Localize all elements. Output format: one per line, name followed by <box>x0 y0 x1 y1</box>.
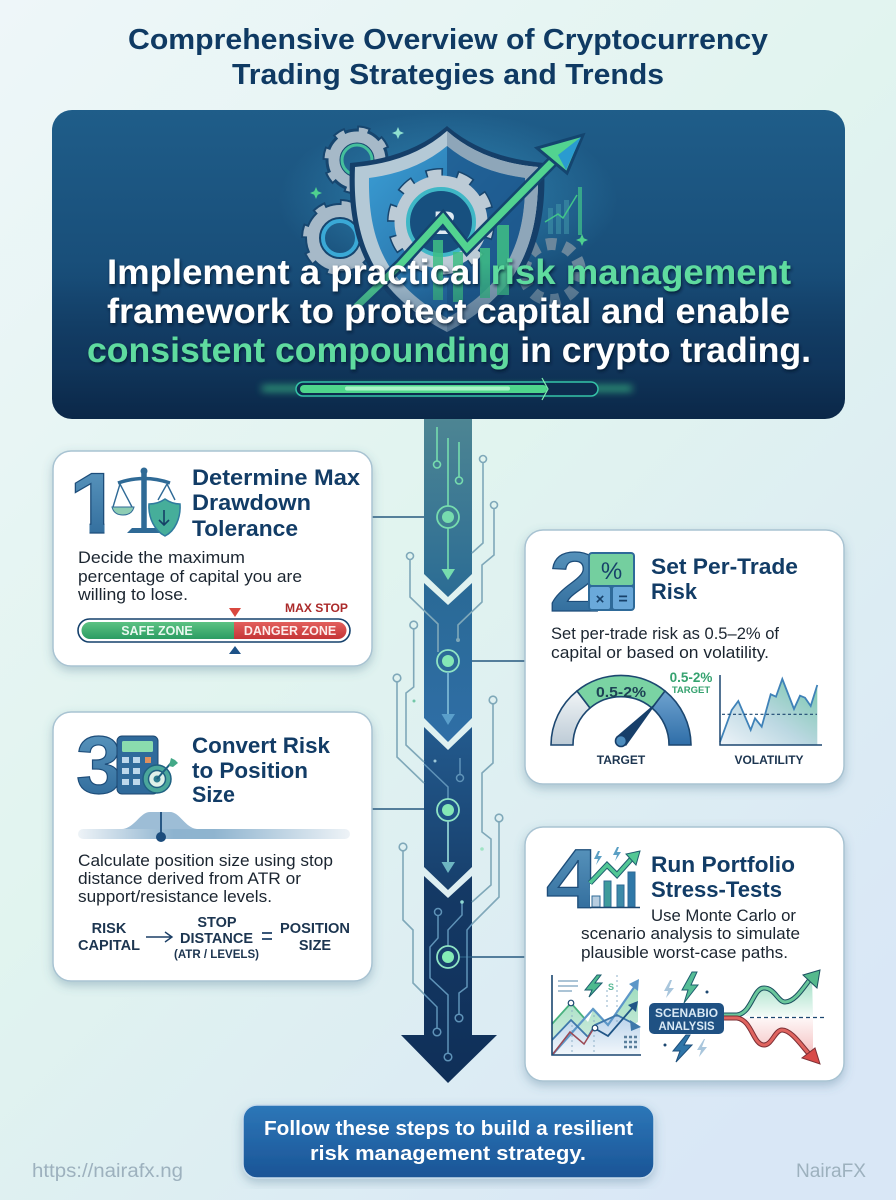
gauge chart <box>551 670 712 767</box>
title: Trading Strategies and Trends <box>232 59 664 91</box>
central downward arrow spine <box>401 419 497 1083</box>
icon: percent calculator: % <box>601 558 622 585</box>
scenario analysis diagram: SCENABIO <box>655 1006 718 1020</box>
gauge chart: 0.5-2% <box>596 684 646 701</box>
panel: step 4 stress tests <box>525 827 844 1081</box>
zone bar: DANGER ZONE <box>244 624 336 638</box>
step description: Calculate position size using stop <box>78 851 333 870</box>
gauge chart: TARGET <box>672 685 710 696</box>
gauge chart: TARGET <box>597 753 646 767</box>
brand name: NairaFX <box>796 1161 866 1182</box>
zone bar: SAFE ZONE <box>121 624 193 638</box>
gauge chart: 0.5-2% <box>670 670 712 685</box>
step heading: Determine Max <box>192 465 361 490</box>
step heading <box>651 852 795 902</box>
step description: scenario analysis to simulate <box>581 924 800 943</box>
step description: distance derived from ATR or <box>78 869 301 888</box>
icon: shield, gears and rising arrow: B <box>433 205 457 241</box>
panel: step 1 drawdown tolerance <box>53 451 372 666</box>
connector lines to cards <box>372 517 525 957</box>
step heading <box>651 554 798 604</box>
icon: percent calculator: × <box>596 591 605 608</box>
hero statement: Implement a practical risk management <box>107 253 791 292</box>
scenario analysis diagram: ANALYSIS <box>658 1019 714 1033</box>
step description <box>581 906 800 962</box>
step heading: Tolerance <box>192 516 298 541</box>
step description <box>77 548 302 604</box>
step heading: Convert Risk <box>192 733 330 758</box>
stop distance slider <box>78 812 350 842</box>
call to action button: risk management strategy. <box>310 1143 586 1165</box>
position size formula: SIZE <box>299 938 331 954</box>
position size formula: POSITION <box>280 921 350 937</box>
progress bar <box>262 378 632 400</box>
step heading <box>192 733 330 807</box>
position size formula: RISK <box>92 921 127 937</box>
step heading <box>192 465 361 541</box>
hero statement: consistent compounding in crypto trading. <box>87 331 811 370</box>
icon: shield, gears and rising arrow <box>309 126 588 338</box>
volatility chart: VOLATILITY <box>734 753 804 767</box>
monte carlo paths chart: S <box>608 982 614 992</box>
panel: step 3 position size <box>53 712 372 981</box>
position size formula: DISTANCE <box>180 931 253 947</box>
position size formula: CAPITAL <box>78 938 140 954</box>
step nodes and arrows on spine <box>437 438 459 968</box>
step heading: to Position <box>192 758 308 783</box>
circuit traces <box>393 427 503 1061</box>
step number 3: 3 <box>76 720 122 811</box>
call to action button <box>243 1105 654 1178</box>
title <box>128 24 768 91</box>
volatility chart <box>720 675 822 767</box>
step number 4: 4 <box>546 832 600 926</box>
step description <box>551 624 779 662</box>
step description: capital or based on volatility. <box>551 643 769 662</box>
step heading: Size <box>192 782 235 807</box>
title: Comprehensive Overview of Cryptocurrency <box>128 24 768 56</box>
step heading: Stress-Tests <box>651 877 782 902</box>
monte carlo paths chart <box>552 975 641 1055</box>
position size formula: STOP <box>197 915 237 931</box>
hero statement <box>87 253 811 370</box>
position size formula <box>78 915 350 961</box>
panel: step 2 per-trade risk <box>525 530 844 784</box>
step description: support/resistance levels. <box>78 887 272 906</box>
step description: percentage of capital you are <box>78 567 302 586</box>
position size formula: (ATR / LEVELS) <box>174 949 259 961</box>
step description: plausible worst-case paths. <box>581 943 788 962</box>
website url: https://nairafx.ng <box>32 1161 183 1182</box>
icon: balance scale with shield <box>112 468 180 536</box>
step heading: Set Per-Trade <box>651 554 798 579</box>
call to action button: Follow these steps to build a resilient <box>264 1118 633 1140</box>
panel: hero banner <box>52 110 845 419</box>
icon: bar chart with rising arrow <box>590 847 640 908</box>
step description: Use Monte Carlo or <box>651 906 796 925</box>
step number 1: 1 <box>69 456 121 552</box>
hero statement: framework to protect capital and enable <box>107 292 790 331</box>
step description: Decide the maximum <box>78 548 245 567</box>
icon: calculator with target <box>117 736 178 794</box>
step description <box>78 851 333 906</box>
step heading: Drawdown <box>192 490 311 515</box>
zone bar: MAX STOP <box>285 601 348 615</box>
step description: Set per-trade risk as 0.5–2% of <box>551 624 779 643</box>
icon: percent calculator <box>588 552 635 611</box>
icon: percent calculator: = <box>618 591 628 608</box>
step heading: Risk <box>651 579 697 604</box>
zone bar <box>78 601 350 654</box>
scenario analysis diagram <box>649 970 825 1064</box>
step number 2: 2 <box>549 535 601 629</box>
step heading: Run Portfolio <box>651 852 795 877</box>
step description: willing to lose. <box>77 585 188 604</box>
